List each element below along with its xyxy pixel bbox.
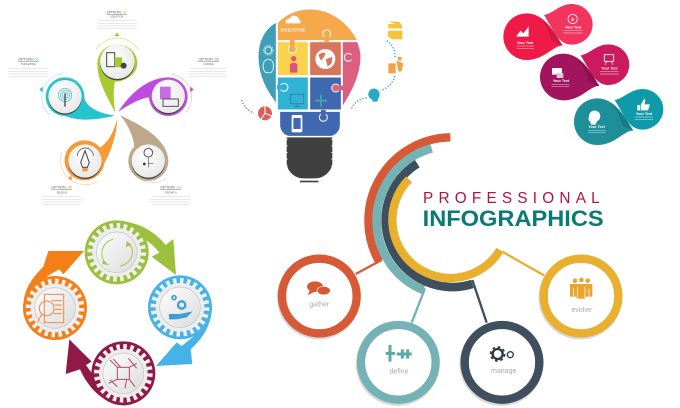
label: option 05: DESIGN [57,190,67,194]
CREATIVE heading with cloud: CREATIVE [281,27,305,32]
label: option 04 [150,185,191,205]
label: option 02 [188,57,227,77]
dotted connector left [242,100,254,113]
orange gear and arrow [23,251,87,340]
label: option 01: OPTION .01 [107,9,127,14]
option 05 orange teardrop [60,118,117,185]
label: option 02: OPTION .02 [198,57,220,62]
green gear and arrow [85,220,176,284]
red drop pair: Your Text [565,26,582,30]
maroon gear and arrow [66,339,155,405]
label: option 04: OPTION .04 [160,185,182,190]
icon: globe [315,49,335,69]
CREATIVE heading with cloud [281,16,305,32]
panel: gear cycle [23,220,212,405]
icon: phone [292,115,302,132]
label: option 03: TARGETING [21,62,36,66]
option 02 purple teardrop [118,74,194,116]
label: option 04: GROWTH [165,190,177,194]
bulb glass puzzle pieces [258,9,361,136]
blue gear and arrow [148,275,212,366]
bulb screw base [287,137,332,182]
circle: gather [281,259,357,335]
circle: define: define [389,368,409,375]
label: option 01 [97,9,137,29]
teal drop pair [574,89,663,145]
circle: manage: manage [491,368,516,375]
circle: manage [464,325,539,402]
option 03 teal teardrop [39,74,115,120]
circle: evolve: evolve [572,307,592,314]
icon: gear and bulb [263,46,274,73]
connector lines [356,252,544,323]
label: option 03: OPTION .03 [18,57,39,62]
circle: evolve [543,259,618,335]
option 01 green teardrop [96,32,139,113]
red drop pair [503,4,593,60]
icon: monitor [290,94,304,107]
panel: five option pinwheel [8,9,227,205]
icon: yellow arch [388,22,402,39]
nested arcs [368,137,500,290]
icon: person at desk [388,57,403,73]
heading: PROFESSIONAL: PROFESSIONAL [423,190,600,207]
red drop pair: $ [571,17,574,23]
circle: define [360,325,436,402]
teal drop pair: Your Text [589,125,606,129]
icon: person [290,56,297,73]
maroon drop pair: Your Text [553,79,570,83]
maroon drop pair: Your Text [601,67,618,71]
red drop pair: Your Text [517,41,534,45]
label: option 05: OPTION .05 [51,185,73,190]
maroon drop pair [540,44,629,100]
label: option 03 [8,57,49,77]
heading: INFOGRAPHICS: INFOGRAPHICS [423,206,604,231]
icon: pie chart [258,106,272,120]
circle: gather: gather [309,302,330,309]
label: option 02: CODING [203,62,214,66]
label: option 05 [41,185,81,205]
teal drop pair: Your Text [636,112,653,116]
panel: creative light bulb [242,9,403,182]
icon: head [368,88,380,102]
panel: ribbon drops [503,4,663,145]
option 04 tan teardrop [120,115,168,183]
panel: professional infographics [281,137,618,402]
icon: plus [315,95,327,107]
dotted connector right [352,41,395,108]
label: option 01: LOCATION [110,15,123,19]
